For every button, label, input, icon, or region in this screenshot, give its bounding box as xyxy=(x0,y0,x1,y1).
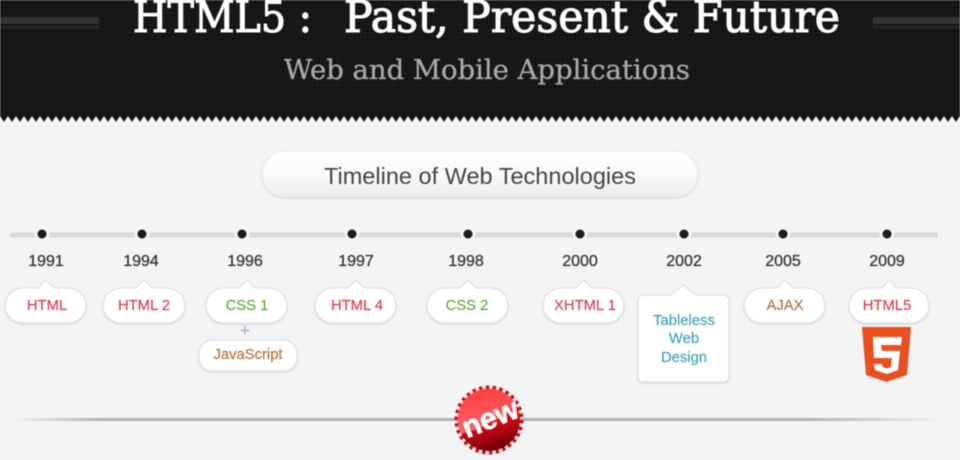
bubble: Tableless Web Design: Tableless xyxy=(653,313,715,329)
bubble: HTML xyxy=(5,280,86,323)
bubble: CSS 2 xyxy=(427,280,508,323)
year labels: 1994 xyxy=(123,253,159,270)
bubble: HTML5 xyxy=(849,280,929,323)
year labels: 2000 xyxy=(562,253,598,270)
bubble: AJAX xyxy=(744,280,825,323)
icon: HTML5 shield xyxy=(862,327,911,382)
title xyxy=(133,0,840,43)
badge: new: new xyxy=(457,392,524,445)
year labels: 1996 xyxy=(227,253,263,270)
header ornament right xyxy=(873,17,960,28)
bubble: Tableless Web Design: Design xyxy=(661,350,707,366)
bubble: Tableless Web Design: Web xyxy=(669,331,699,347)
year labels: 2009 xyxy=(869,253,905,270)
subtitle: Web and Mobile Applications xyxy=(284,55,690,86)
year labels xyxy=(28,253,905,270)
bubble: HTML 4: HTML 4 xyxy=(331,298,383,314)
year labels: 2005 xyxy=(765,253,801,270)
year labels: 2002 xyxy=(666,253,702,270)
header ornament left xyxy=(0,17,99,28)
plus sign: + xyxy=(240,321,250,340)
divider rule xyxy=(10,418,945,421)
header band xyxy=(0,0,960,123)
bubble: Tableless Web Design xyxy=(638,285,729,382)
bubble: AJAX: AJAX xyxy=(766,298,804,314)
bubble: JavaScript xyxy=(199,340,297,371)
bubble: HTML 2: HTML 2 xyxy=(118,298,170,314)
bubble: HTML5: HTML5 xyxy=(863,298,911,314)
bubble: XHTML 1 xyxy=(543,280,624,323)
year labels: 1997 xyxy=(338,253,374,270)
bubble: XHTML 1: XHTML 1 xyxy=(554,298,616,314)
timeline axis xyxy=(10,226,938,242)
section heading pill: Timeline of Web Technologies xyxy=(324,163,636,189)
year labels: 1998 xyxy=(448,253,484,270)
section heading pill xyxy=(262,151,698,197)
bubble: HTML 4 xyxy=(315,280,396,323)
bubble: CSS 2: CSS 2 xyxy=(446,298,488,314)
year labels: 1991 xyxy=(28,253,64,270)
bubble: CSS 1: CSS 1 xyxy=(226,298,268,314)
bubble: JavaScript: JavaScript xyxy=(213,347,283,363)
bubble: HTML 2 xyxy=(103,280,185,323)
bubble: HTML: HTML xyxy=(27,298,67,314)
bubble: CSS 1 xyxy=(206,280,287,323)
